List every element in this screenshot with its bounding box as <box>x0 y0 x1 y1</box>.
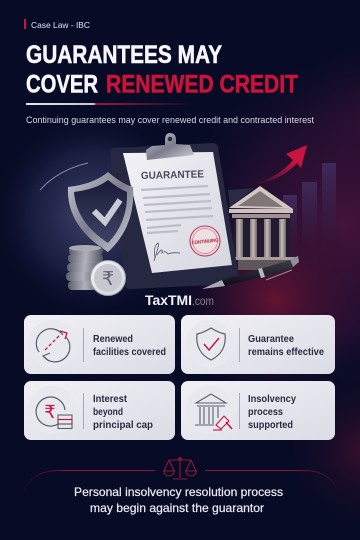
card: guarantee remains effective: Guarantee <box>248 334 294 345</box>
footer statement: Personal insolvency resolution process <box>74 485 283 499</box>
tag: Case Law - IBC: Case Law - IBC <box>31 20 90 30</box>
card: insolvency process supported: process <box>248 407 283 418</box>
title: GUARANTEES MAY <box>26 41 222 69</box>
footer frame lines <box>20 470 342 500</box>
decorative arc <box>40 163 88 190</box>
clipboard with guarantee document <box>110 133 239 289</box>
icon: shield check <box>197 328 225 360</box>
document text lines <box>141 186 213 233</box>
card: insolvency process supported: supported <box>248 420 293 431</box>
card: renewed facilities covered: Renewed <box>93 334 133 345</box>
continuing stamp: CONTINUING <box>191 238 219 246</box>
logo: TaxTMI.com: TaxTMI <box>145 293 192 308</box>
card: renewed facilities covered: facilities covered <box>93 347 166 358</box>
footer statement <box>74 485 283 515</box>
icon: rupee and ledger <box>36 397 72 428</box>
icon: rupee coin <box>90 260 126 296</box>
icon: bank building <box>228 186 295 270</box>
icon: rupee coin: ₹ <box>102 268 114 290</box>
document heading: GUARANTEE <box>141 169 204 182</box>
icon: pen <box>202 256 299 289</box>
title: RENEWED CREDIT <box>106 70 298 98</box>
continuing stamp <box>190 226 220 256</box>
logo: TaxTMI.com <box>145 293 214 308</box>
logo: TaxTMI.com: .com <box>192 296 214 308</box>
card: guarantee remains effective <box>181 315 335 374</box>
icon: courthouse and gavel <box>195 394 232 430</box>
icon: scales of justice <box>164 457 196 479</box>
icon: coin stack <box>66 245 103 290</box>
card: guarantee remains effective: remains effective <box>248 347 324 358</box>
footer statement: may begin against the guarantor <box>90 501 264 515</box>
subtitle: Continuing guarantees may cover renewed credit and contracted interest <box>26 115 314 125</box>
card: interest beyond principal cap: principal cap <box>93 420 153 431</box>
clipboard clip <box>146 133 194 160</box>
signature <box>154 243 180 261</box>
title <box>26 41 298 98</box>
icon: shield with check <box>68 172 133 252</box>
icon: rupee and ledger: ₹ <box>44 402 56 423</box>
hero illustration <box>40 133 336 296</box>
title: COVER <box>26 70 98 98</box>
card: insolvency process supported: Insolvency <box>248 394 296 405</box>
card: interest beyond principal cap: Interest <box>93 394 128 405</box>
card: interest beyond principal cap <box>24 381 175 440</box>
growth arrow <box>253 145 307 185</box>
card: interest beyond principal cap: beyond <box>93 407 123 418</box>
card: renewed facilities covered <box>24 315 175 374</box>
icon: renewal cycle <box>36 329 70 362</box>
bar chart backdrop <box>283 163 336 260</box>
card: insolvency process supported <box>181 381 335 440</box>
